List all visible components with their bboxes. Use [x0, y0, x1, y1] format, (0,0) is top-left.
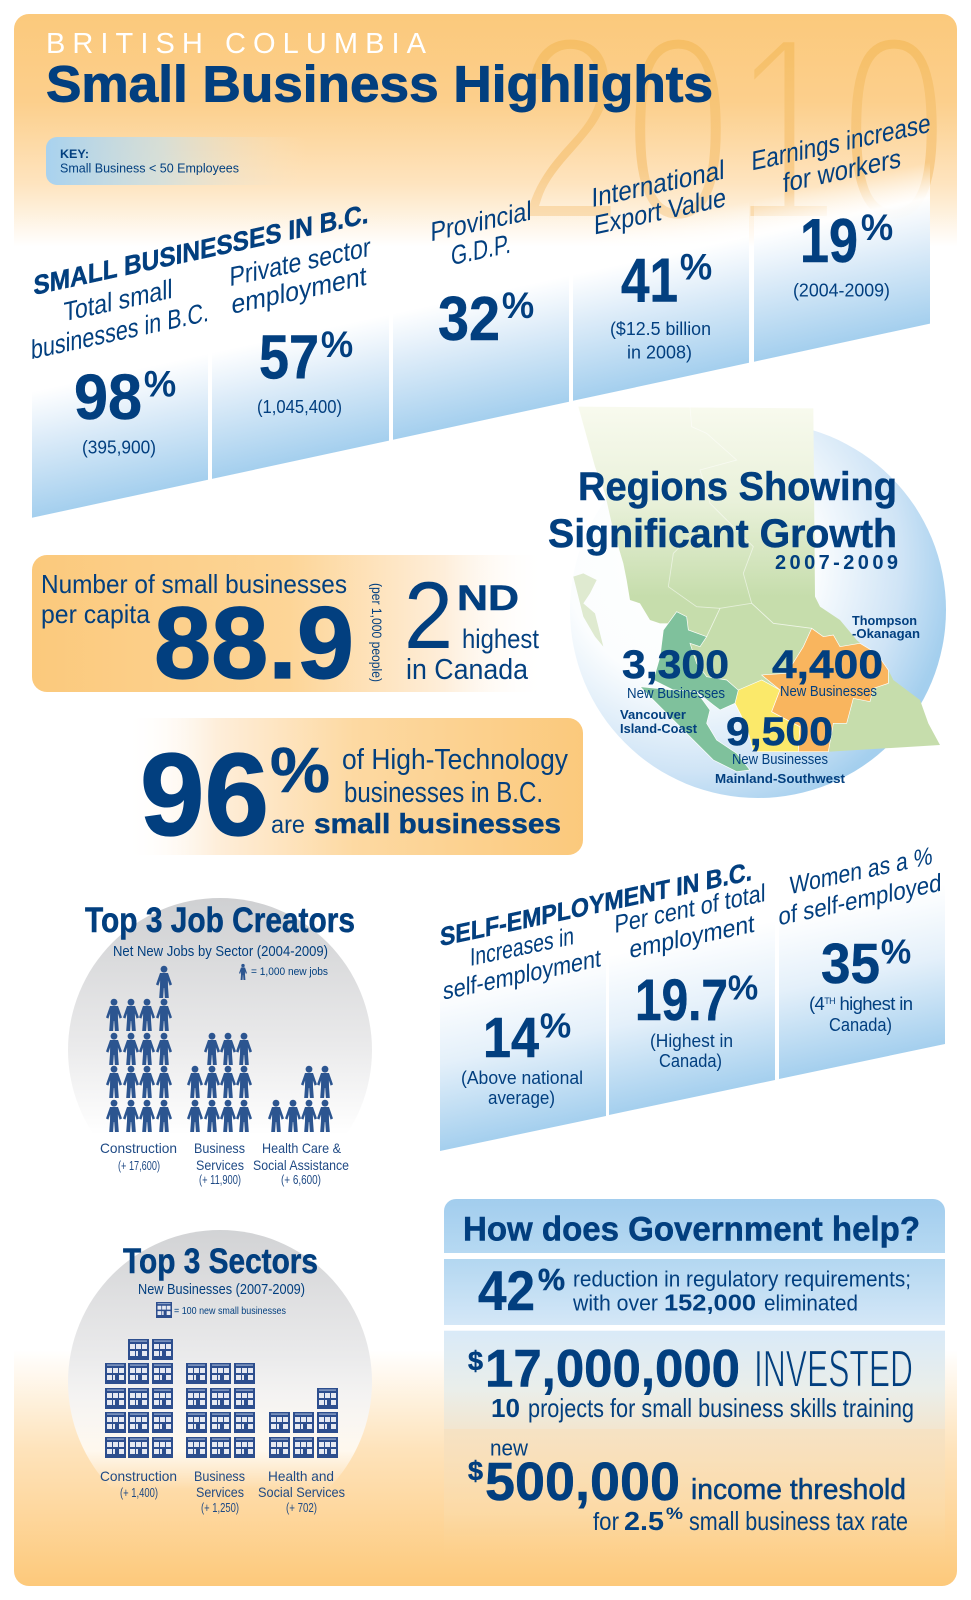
region: Mainland-Southwest: New Businesses [732, 751, 828, 768]
callout: businesses per capita: 2 [404, 563, 453, 669]
key legend: KEY: [60, 147, 89, 161]
stat column: per cent of total employment: Canada) [659, 1050, 722, 1071]
stat column: earnings increase: for workers [783, 142, 901, 198]
sector labels: Social Services [258, 1484, 345, 1500]
stat column: total small businesses: businesses in B.C. [31, 296, 209, 365]
region: Vancouver Island-Coast: Island-Coast [620, 721, 698, 736]
region: Vancouver Island-Coast: Vancouver [620, 707, 686, 722]
band: income threshold: % [666, 1504, 683, 1523]
band: income threshold: 500,000 [485, 1452, 680, 1512]
regions heading: Regions Showing [578, 465, 897, 509]
stat column: private sector employment: % [321, 325, 353, 364]
band: skills training investment: 17,000,000 [485, 1340, 740, 1399]
callout: high-technology share: % [270, 734, 330, 806]
region: Thompson-Okanagan: New Businesses [780, 683, 877, 700]
job sector labels: (+ 11,900) [199, 1172, 241, 1187]
stat column: increases in self-employment: (Above national [461, 1067, 583, 1088]
region: Thompson-Okanagan [772, 613, 920, 700]
region: Mainland-Southwest: 9,500 [726, 710, 833, 754]
government heading band: How does Government help? [463, 1211, 920, 1249]
stat column: increases in self-employment: average) [488, 1087, 555, 1108]
panel: small businesses in B.C. [31, 107, 930, 518]
panel: regions map [548, 407, 946, 798]
region: Vancouver Island-Coast [620, 643, 729, 736]
stat column: private sector employment [212, 231, 389, 479]
stat column: international export value: Export Value [594, 181, 726, 241]
sector labels: (+ 702) [286, 1500, 317, 1515]
map circle backdrop [570, 422, 946, 798]
stat column: total small businesses: % [144, 365, 176, 404]
job sector labels: Business [194, 1140, 245, 1156]
stat column: per cent of total employment: Per cent of total [614, 879, 766, 939]
stat column: provincial G.D.P.: % [502, 287, 534, 326]
job sector labels: (+ 6,600) [281, 1172, 321, 1187]
grey circle backdrop [68, 898, 372, 1202]
sector labels: Services [196, 1484, 244, 1500]
stat column: women as a percentage of self-employed: Canada) [829, 1014, 892, 1035]
stat column: women as a percentage of self-employed: 35 [821, 932, 880, 996]
pictogram: business services jobs [187, 1033, 252, 1132]
stat column: provincial G.D.P. [393, 195, 569, 440]
band: regulatory reduction: with over [572, 1291, 658, 1316]
key legend [46, 137, 308, 185]
sector labels: (+ 1,400) [120, 1485, 158, 1500]
job creators heading [85, 901, 355, 960]
stat column: earnings increase [752, 107, 930, 362]
regions heading [548, 465, 898, 574]
region: Mainland-Southwest: Mainland-Southwest [715, 771, 846, 786]
stat column: increases in self-employment: self-employment [443, 944, 601, 1006]
icon legend: person equals 1,000 jobs: = 1,000 new jobs [251, 966, 328, 978]
stat column: international export value: in 2008) [627, 342, 692, 362]
stat column: per cent of total employment: employment [630, 910, 754, 964]
stat column: women as a percentage of self-employed: (4 [809, 993, 825, 1014]
job sector labels: (+ 17,600) [118, 1158, 160, 1173]
title [46, 28, 713, 112]
panel: self-employment in B.C. [440, 842, 945, 1151]
band: skills training investment [444, 1331, 945, 1429]
region: Vancouver Island-Coast: New Businesses [627, 685, 725, 702]
band: skills training investment: $ [468, 1346, 483, 1376]
job sector labels: Services [196, 1157, 244, 1173]
icon legend: building equals 100 businesses [156, 1302, 286, 1318]
stat column: earnings increase: % [861, 208, 893, 248]
callout: businesses per capita: in Canada [406, 654, 529, 686]
icon legend: building equals 100 businesses: = 100 new small businesses [174, 1305, 286, 1317]
stat column: international export value: ($12.5 billion [610, 319, 711, 339]
job sector labels [100, 1140, 349, 1187]
sectors heading [123, 1242, 318, 1298]
band: income threshold: $ [468, 1456, 483, 1486]
stat column: provincial G.D.P.: Provincial [430, 195, 532, 247]
panel: how does government help [444, 1199, 945, 1572]
panel: top 3 sectors [68, 1230, 372, 1534]
stat column: women as a percentage of self-employed: Women as a % [790, 842, 932, 900]
stat column: total small businesses [31, 273, 209, 518]
callout: businesses per capita [32, 555, 547, 700]
stat column: women as a percentage of self-employed: % [881, 933, 911, 970]
pictogram: business services businesses [186, 1363, 255, 1458]
title: BRITISH COLUMBIA [46, 28, 427, 60]
band: skills training investment: 10 [491, 1393, 520, 1423]
sector labels: Business [194, 1468, 245, 1484]
stat column: private sector employment: 57 [259, 324, 319, 393]
title: Small Business Highlights [46, 56, 713, 112]
regions heading: Significant Growth [548, 512, 897, 556]
stat column: international export value [573, 154, 749, 401]
band: income threshold: new [490, 1436, 528, 1461]
band: regulatory reduction: eliminated [764, 1291, 858, 1316]
callout: high-technology share [125, 718, 583, 860]
sector labels [100, 1468, 345, 1515]
stat column: increases in self-employment: % [540, 1007, 571, 1044]
band: income threshold: 2.5 [624, 1506, 664, 1536]
stat column: earnings increase: Earnings increase [751, 107, 931, 176]
panel: top 3 job creators [68, 898, 372, 1202]
band: income threshold: income threshold [691, 1474, 906, 1506]
callout: businesses per capita: highest [462, 624, 539, 654]
stat column: per cent of total employment [609, 879, 775, 1115]
callout: high-technology share: of High-Technology [342, 744, 568, 776]
band: income threshold [444, 1429, 945, 1572]
job sector labels: Construction [100, 1140, 177, 1156]
band: regulatory reduction: 42 [478, 1259, 535, 1322]
sectors heading: Top 3 Sectors [123, 1242, 318, 1281]
job creators heading: Top 3 Job Creators [85, 901, 355, 940]
stat column: women as a percentage of self-employed [778, 842, 945, 1079]
stat column: per cent of total employment: 19.7 [635, 968, 728, 1033]
stat column: women as a percentage of self-employed: TH [824, 996, 836, 1006]
callout: businesses per capita: (per 1,000 people) [369, 583, 385, 682]
callout: high-technology share: 96 [140, 729, 269, 860]
callout: high-technology share: are [271, 811, 305, 839]
stat column: private sector employment: Private sector [230, 231, 370, 292]
stat column: provincial G.D.P.: G.D.P. [451, 228, 511, 271]
stat column: women as a percentage of self-employed: highest in [835, 993, 913, 1014]
sector labels: Construction [100, 1468, 177, 1484]
stat column: international export value: % [680, 248, 712, 287]
band: income threshold: for [593, 1508, 619, 1536]
stat column: private sector employment: (1,045,400) [257, 397, 342, 417]
callout: businesses per capita: per capita [41, 599, 151, 629]
band: regulatory reduction [444, 1259, 945, 1325]
region: Mainland-Southwest [715, 710, 846, 786]
callout: businesses per capita: Number of small businesses [41, 569, 347, 599]
stat column: increases in self-employment: Increases in [470, 922, 574, 972]
stat column: earnings increase: (2004-2009) [793, 280, 890, 300]
stat column: earnings increase: 19 [800, 207, 858, 276]
region: Thompson-Okanagan: Thompson [852, 613, 917, 628]
callout: high-technology share: businesses in B.C. [344, 777, 543, 809]
callout: high-technology share: small businesses [314, 808, 561, 839]
section heading: self-employment: SELF-EMPLOYMENT IN B.C. [440, 856, 752, 952]
icon legend: person equals 1,000 jobs [239, 964, 328, 980]
region: Thompson-Okanagan: 4,400 [772, 643, 883, 687]
stat column: international export value: International [592, 154, 724, 213]
stat column: total small businesses: Total small [64, 273, 172, 327]
stat column: provincial G.D.P.: 32 [438, 285, 500, 354]
regions heading: 2007-2009 [775, 552, 898, 574]
callout: businesses per capita: ND [457, 579, 519, 618]
section heading: small businesses: SMALL BUSINESSES IN B.C. [34, 198, 368, 301]
pictogram: health and social services businesses [269, 1388, 338, 1458]
government heading band [444, 1199, 945, 1253]
stat column: per cent of total employment: (Highest in [650, 1030, 733, 1051]
pictogram: construction businesses [105, 1339, 173, 1458]
stat column: women as a percentage of self-employed: of self-employed [778, 869, 942, 931]
map of British Columbia [573, 407, 940, 772]
stat column: total small businesses: 98 [74, 361, 142, 433]
grey circle backdrop [68, 1230, 372, 1534]
stat column: per cent of total employment: % [728, 969, 758, 1006]
band: income threshold: small business tax rate [689, 1506, 908, 1536]
stat column: private sector employment: employment [232, 260, 367, 320]
callout: businesses per capita: 88.9 [154, 586, 354, 700]
pictogram: construction jobs [106, 966, 172, 1132]
job sector labels: Health Care & [262, 1140, 342, 1156]
sector labels: (+ 1,250) [201, 1500, 239, 1515]
sectors heading: New Businesses (2007-2009) [138, 1281, 305, 1298]
band: regulatory reduction: reduction in regulatory requirements; [573, 1267, 911, 1292]
job sector labels: Social Assistance [253, 1157, 349, 1173]
key legend: Small Business < 50 Employees [60, 160, 239, 176]
region: Vancouver Island-Coast: 3,300 [622, 643, 729, 687]
stat column: increases in self-employment: 14 [483, 1006, 539, 1070]
pictogram: health care jobs [268, 1066, 333, 1132]
sector labels: Health and [268, 1468, 334, 1484]
band: regulatory reduction: % [538, 1262, 565, 1297]
stat column: increases in self-employment [440, 922, 606, 1151]
job creators heading: Net New Jobs by Sector (2004-2009) [113, 943, 328, 960]
region: Thompson-Okanagan: -Okanagan [852, 626, 920, 641]
stat column: international export value: 41 [621, 246, 678, 316]
stat column: total small businesses: (395,900) [82, 438, 156, 458]
band: regulatory reduction: 152,000 [664, 1290, 756, 1316]
